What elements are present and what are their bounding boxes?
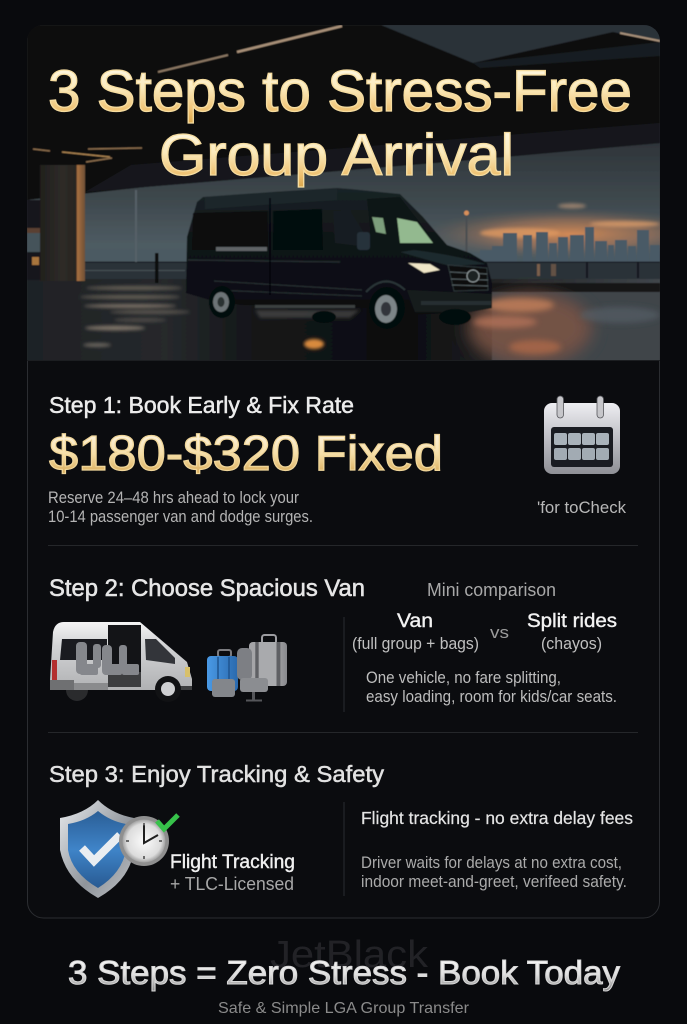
- safety description: indoor meet-and-greet, verifeed safety.: [361, 873, 627, 891]
- rear wheel: [66, 690, 88, 701]
- shield caption: [170, 852, 295, 894]
- tagline: Safe & Simple LGA Group Transfer: [218, 1000, 470, 1017]
- step 2 heading: Step 2: Choose Spacious Van: [49, 575, 365, 602]
- comparison: van: [352, 611, 479, 653]
- safety description: Driver waits for delays at no extra cost,: [361, 854, 622, 872]
- comparison: vs: vs: [490, 623, 509, 642]
- clock: [119, 816, 169, 866]
- comparison: split rides: Split rides: [527, 611, 617, 632]
- price: $180-$320 Fixed: [49, 427, 443, 481]
- sky: [28, 142, 660, 262]
- mini comparison label: Mini comparison: [427, 580, 556, 600]
- brand watermark: JetBlack: [270, 934, 429, 976]
- poles: [135, 190, 469, 283]
- skyline: [480, 226, 660, 257]
- step 1 section: [48, 392, 626, 526]
- comparison: split rides: (chayos): [541, 635, 602, 653]
- footer: [68, 934, 621, 1017]
- grille: [448, 265, 488, 291]
- shield caption: Flight Tracking: [170, 852, 295, 873]
- icon: calendar: [544, 396, 620, 474]
- step 1 description: [48, 489, 313, 526]
- step 1 description: Reserve 24–48 hrs ahead to lock your: [48, 489, 299, 507]
- shield caption: + TLC-Licensed: [170, 874, 294, 894]
- front wheel: [155, 676, 181, 702]
- rear wheel: [209, 286, 235, 318]
- van seats: [76, 642, 139, 675]
- calendar caption: 'for toCheck: [537, 498, 626, 517]
- step 2 section: [49, 575, 617, 712]
- rail and water: [84, 261, 660, 280]
- van windows: [192, 197, 437, 251]
- step 1 heading: Step 1: Book Early & Fix Rate: [49, 392, 354, 418]
- step 3 section: [49, 761, 633, 898]
- icon: luggage and seat: [207, 635, 287, 702]
- comparison: van: (full group + bags): [352, 635, 479, 653]
- step 1 description: 10-14 passenger van and dodge surges.: [48, 508, 313, 526]
- pillar: [27, 165, 85, 281]
- safety description: [361, 854, 627, 891]
- title: Group Arrival: [159, 123, 514, 188]
- van body trim: [188, 260, 362, 296]
- title: 3 Steps to Stress-Free: [48, 59, 632, 124]
- bottom hero rule: [27, 360, 660, 361]
- call to action: 3 Steps = Zero Stress - Book Today: [68, 954, 621, 991]
- van benefits: One vehicle, no fare splitting,: [366, 669, 561, 687]
- green check: [157, 815, 178, 829]
- comparison: van: Van: [397, 611, 433, 632]
- van benefits: easy loading, room for kids/car seats.: [366, 688, 617, 706]
- icon: shield with clock: [60, 800, 178, 898]
- black van: [186, 188, 492, 329]
- ceiling structure: [27, 25, 660, 200]
- ground: [27, 279, 660, 364]
- van benefits: [366, 669, 617, 706]
- flight tracking headline: Flight tracking - no extra delay fees: [361, 808, 633, 828]
- comparison: split rides: [527, 611, 617, 653]
- hero photo: van at airport at dusk: [27, 25, 687, 364]
- icon: silver van with seats: [50, 622, 192, 702]
- headlight: [408, 263, 440, 273]
- step 3 heading: Step 3: Enjoy Tracking & Safety: [49, 761, 384, 787]
- title: [48, 59, 632, 188]
- front wheel: [369, 287, 405, 329]
